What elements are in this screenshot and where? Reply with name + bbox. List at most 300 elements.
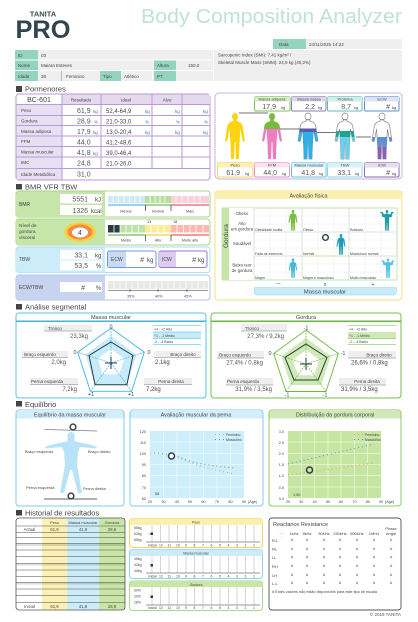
panel: tbw: # [192,257,196,264]
legend: muscle [153,326,201,344]
results table: 17,9 [77,129,91,136]
icon: very muscular figure [382,258,394,278]
box: peso: kg [245,171,249,176]
chart: weight history: 62kg [134,532,142,536]
results table: kg [145,130,150,135]
panel: visceral fat: gordura [19,229,36,235]
label: braco esquerdo fat: 27,4% / 0,8kg [226,360,263,366]
chart: weight history: 7 [202,544,204,548]
chart: muscle history: 40kg [134,569,142,573]
panel: body fat distribution: 20 [286,500,290,504]
panel: leg muscle rating: Avaliação muscular da perna [161,412,232,418]
panel: reactance resistance: # [373,554,376,560]
panel: muscle mass radar: Massa muscular [91,315,131,321]
panel: visceral fat: Muito alto [182,238,198,242]
panel: physique rating: Magro e musculoso [303,276,334,280]
panel: ecw tbw: 35% [127,294,135,298]
label: braco esquerdo: Braço esquerdo [24,352,56,357]
legend: muscle: -2 - -4 Baixo [154,340,173,344]
label: perna esquerda fat: 31,9% / 3,5kg [235,387,272,393]
panel: reactance resistance: RH [272,564,278,569]
panel: muscle mass radar [16,313,206,398]
panel: body composition [215,93,402,179]
panel: leg muscle rating: Feminino [226,433,240,437]
chart: muscle history: 11 [168,574,171,578]
panel: reactance resistance: # [390,572,393,577]
label: braco direito: Braço direito [170,352,196,357]
box: proteina [328,96,362,111]
table: history: 61,9 [50,527,59,532]
legend: muscle: +1 - -1 Médio [154,334,175,338]
panel: reactance resistance: L-L [272,581,279,586]
panel: muscle balance: Braço direito [88,449,111,454]
box: massa adiposa: kg [281,105,285,110]
icon: body outline [45,432,97,493]
box: peso: 61,9 [226,170,240,177]
icon: thin figure [289,258,297,278]
panel: tbw: kg [95,254,101,260]
panel: leg muscle rating: 30 [161,500,166,504]
figure: ecw and icw [372,113,392,159]
date row [273,39,402,49]
box: proteina: Proteína [337,97,353,102]
panel: tbw: ICW [162,257,172,263]
panel: reactance resistance: # [323,554,326,560]
figure: protein and tbw [335,113,355,159]
chart: weight history: 1 [253,544,255,548]
panel: leg muscle rating: 60 [142,497,146,501]
results table: 21,0-33,0 [106,120,132,126]
chart: muscle history: 8 [194,574,196,578]
panel: reactance resistance: # [306,537,309,542]
heading: historial: Historial de resultados [25,508,99,518]
results table: % [204,120,208,124]
panel: visceral fat: Alto [155,238,161,242]
panel: reactance resistance: # [291,580,294,585]
box: massa muscular: Massa muscular [294,163,324,168]
chart: fat history: 9 [185,606,187,610]
chart: fat history: 10 [176,606,180,610]
icon: solidly built figure [380,210,394,231]
panel: reactance resistance: # [339,580,342,585]
logo: TANITA [30,10,57,18]
panel: reactance resistance: # [291,537,294,542]
panel: body fat distribution: 70 [352,500,357,504]
chart: weight history: 8 [194,544,196,548]
panel: ecw tbw: # [81,285,85,292]
logo: PRO [16,16,70,44]
sarcopenic index: Skeletal Muscle Mass (SMM): 24,9 kg (40,2%) [218,60,311,65]
label: braco esquerdo [22,351,68,366]
results table: kg [145,109,150,114]
chart: muscle history: 3 [236,574,238,578]
panel: body fat distribution: Feminino [365,433,379,437]
label: braco esquerdo fat [217,351,264,366]
panel: reactance resistance [269,518,401,610]
results table: % [176,120,180,124]
box: proteina: kg [354,105,358,110]
results table: 41,2-48,6 [106,140,132,146]
panel: body fat distribution: 1.0 [279,474,284,478]
panel: reactance resistance: # [390,554,393,560]
chart: muscle history: 12 [159,574,163,578]
radar chart: fat [268,326,345,398]
box: massa ossea: kg [318,105,322,110]
box: massa muscular: kg [319,171,323,176]
panel: reactance resistance: Reactance Resistance [273,522,328,528]
icon: normal figure [336,234,346,255]
chart: weight history: 9 [185,544,187,548]
panel: reactance resistance: # [373,537,376,542]
box: peso: Peso [230,163,240,168]
label: braco esquerdo: 2,0kg [51,360,66,366]
panel: body fat distribution: 1.5 [279,463,284,467]
panel: reactance resistance: # [373,546,376,551]
panel: reactance resistance: RL [272,546,278,552]
panel: bmr [16,191,210,217]
panel: leg muscle rating: 50 [188,500,192,504]
results table: Ideal [121,98,131,102]
heading: analise segmental: Análise segmental [25,302,87,312]
table: history: Inicial [24,604,35,609]
label: perna direita: Perna direita [158,379,184,384]
panel: physique rating: Robusto [350,228,363,232]
label: perna direita fat: 31,9% / 3,5kg [341,387,378,393]
chart: muscle history: 1 [253,574,255,578]
chart: muscle history: 5 [219,574,221,578]
panel: bmr: 5551 [72,196,88,204]
table: history: Peso [50,520,60,525]
panel: physique rating: 0 [324,282,327,287]
panel: reactance resistance: # [291,554,294,560]
panel: physique rating: Alto [238,221,246,226]
chart: muscle history: 4 [228,574,230,578]
table: history: 28,9 [108,527,117,532]
patient info: Idade [18,74,30,79]
icon: visceral fat gauge: 4 [78,230,82,237]
patient info: Nome [18,63,31,68]
panel: visceral fat: 18 [173,220,177,224]
results table: 61,9 [77,108,91,115]
chart: weight history: Inicial [148,544,157,548]
panel: tbw: # [140,257,144,264]
chart: weight history: 10 [176,544,180,548]
label: perna direita fat: Perna direita [354,379,380,384]
results table: Peso [21,108,32,113]
label: braco esquerdo fat: Braço esquerdo [219,352,251,358]
box: icw: # [386,170,390,177]
legend: fat: +4 - +2 Alto [349,328,367,332]
table: history: 41,8 [79,604,88,609]
sarcopenic index [214,50,402,81]
results table: kg [203,109,208,114]
panel: leg muscle rating: 90 [242,500,246,504]
results table: Resultado [71,98,92,102]
chart: fat history: 2 [244,606,246,610]
panel: reactance resistance: 50kHz [318,531,330,536]
patient info: Feminino [66,74,85,79]
panel: muscle balance: Equilíbrio da massa muscular [34,412,106,418]
box: ecw: # [386,104,390,111]
results table: kg [203,130,208,135]
radar chart: fat: -1 [304,326,308,332]
panel: physique rating: de gordura [232,268,253,273]
box: tbw: kg [355,171,359,176]
chart: weight history: 12 [159,544,163,548]
panel: leg muscle rating: 120 [140,430,146,434]
label: perna direita fat [339,378,386,393]
panel: physique rating: Musculoso normal [350,252,379,256]
panel: physique rating: Falta de exercício [255,252,283,256]
legend: fat [348,326,396,344]
panel: physique rating: Obeso [303,228,313,232]
chart: fat history: 8 [194,606,196,610]
label: braco direito fat: 26,6% / 0,8kg [351,360,388,366]
label: braco direito fat: Braço direito [366,352,392,358]
panel: reactance resistance: # [291,563,294,568]
panel: reactance resistance: # [323,537,326,542]
results table: Massa muscular [21,150,54,154]
panel: leg muscle rating: 110 [140,441,146,445]
panel: leg muscle rating: Masculino [226,438,242,442]
label: perna esquerda: 7,2kg [62,387,77,393]
box: massa muscular [292,162,326,177]
chart: muscle history: 2 [244,574,246,578]
label: perna esquerda fat: Perna esquerda [227,379,260,384]
patient info: 38 [41,74,47,79]
chart: muscle history: 9 [185,574,187,578]
radar chart: muscle: 0 [73,350,77,356]
label: tronco fat [241,324,287,340]
panel: tbw: kg [147,258,153,264]
legend: muscle: +4 - +2 Alto [154,328,172,332]
panel: reactance resistance: # [291,546,294,551]
table: history: Massa muscular [68,520,98,525]
chart: fat history: 3 [236,606,238,610]
label: perna esquerda fat [226,378,273,393]
panel: tbw: % [96,264,102,270]
panel: physique rating: Avaliação física [289,194,328,200]
patient info: ID [18,53,23,58]
panel: visceral fat: Nível de [19,223,37,229]
results table: 41,8 [77,150,91,157]
results table: % [145,120,149,124]
panel: reactance resistance: # [306,546,309,551]
results table: IMC [21,160,30,165]
radar chart: muscle [73,324,151,398]
results table: kg [93,130,98,135]
panel: reactance resistance: # [291,572,294,577]
results table: kg [175,130,180,135]
panel: leg muscle rating: 58 [155,492,159,496]
panel: leg muscle rating: 90 [142,463,146,467]
table: history: 28,9 [108,604,117,609]
panel: reactance resistance: # [373,572,376,577]
results table: 24,8 [77,160,91,168]
panel: reactance resistance: # [390,563,393,568]
box: icw [364,162,399,177]
panel: bmr: 1326 [72,208,88,215]
panel: reactance resistance: # [390,580,393,585]
results table: Alvo [163,98,172,102]
radar chart: muscle: 0 [147,350,151,356]
box: ecw: kg [392,105,396,110]
icon: hidden obese figure [288,210,298,231]
chart: muscle history: 45kg [134,557,142,561]
radar chart: muscle: +1 [88,392,94,398]
table: history: Actual [24,527,35,532]
panel: leg muscle rating: 20 [148,500,152,504]
panel: physique rating: em gordura [231,226,254,232]
panel: muscle balance: Perna direita [83,486,106,491]
panel: body fat distribution: 3.0 [279,430,284,434]
label: tronco [44,325,92,340]
box: massa ossea: 2,2 [305,104,315,111]
panel: visceral fat: 13 [147,220,151,224]
panel: physique rating: Magro [255,276,265,280]
chart: weight history: 6 [210,544,212,548]
chart: weight history: 60kg [134,538,142,542]
panel: body fat distribution: Masculino [365,438,381,442]
table: history: 61,9 [50,604,59,609]
panel: bmr: Mais [186,210,194,214]
panel: body fat distribution: 30 [299,500,303,504]
box: massa ossea [292,96,326,111]
legend: fat: +1 - -1 Médio [349,334,370,338]
results table: Gordura [21,118,38,124]
label: perna direita: 7,2kg [146,387,161,393]
results table: Idade Metabólica [21,172,56,177]
panel: leg muscle rating: (Age) [248,500,258,504]
panel: muscle balance [16,410,124,506]
panel: body fat distribution [269,410,401,506]
panel: body fat distribution: 90 [379,500,383,504]
box: proteina: 8,7 [341,104,351,111]
box: massa ossea: Massa óssea [297,97,322,102]
label: perna direita [144,378,192,393]
table: history: Gordura [105,520,120,525]
panel: reactance resistance: 500kHz [350,531,364,536]
box: tbw: TBW [341,163,350,168]
chart: muscle history: 6 [210,574,212,578]
panel: fat radar: Gordura [296,315,317,321]
results table: Massa adiposa [21,129,52,134]
chart: muscle history: 10 [176,574,180,578]
panel: reactance resistance: # [356,572,359,577]
box: icw: kg [392,171,396,176]
heading: bmr vfr tbw: BMR VFR TBW [25,182,78,192]
panel: visceral fat [16,219,210,245]
label: tronco: Tronco [48,326,62,331]
chart: weight history: 3 [236,544,238,548]
label: perna esquerda: Perna esquerda [31,379,64,384]
panel: ecw tbw: % [96,286,102,292]
box: ffm: 44,0 [263,170,277,177]
chart: weight history: Peso [192,520,200,524]
results table: 44,0 [77,140,91,146]
panel: body fat distribution: Distribuição da gordura corporal [296,412,374,418]
chart: muscle history: Massa muscular [183,552,210,556]
panel: physique rating: Massa muscular [304,290,346,296]
panel: reactance resistance: # [390,546,393,551]
chart: fat history: 11 [168,606,171,610]
patient info: 150,0 [188,63,200,68]
chart: muscle history [130,550,262,578]
panel: body fat distribution: 0.5 [279,486,284,490]
panel: tbw [16,247,210,272]
panel: visceral fat: Médio [121,238,131,242]
title: Body Composition Analyzer [141,5,402,28]
panel: tbw: ECW [111,257,123,263]
chart: fat history: 29% [134,594,141,598]
chart: fat history: 30% [134,588,141,592]
panel: reactance resistance: # [323,572,326,577]
panel: bmr: BMR [19,202,30,208]
panel: reactance resistance: # Estes valores não estão disponíveis para este tipo de escala [272,590,378,594]
panel: tbw: 53,5 [74,263,88,270]
patient info: Tipo [103,74,112,79]
box: massa adiposa: 17,9 [262,104,276,111]
panel: visceral fat: visceral [19,235,35,241]
patient info: PT [157,74,163,79]
results table: kg [93,109,98,114]
patient info: Maiara Esteves [41,63,73,68]
results table: 21,0-26,0 [106,162,132,168]
panel: physique rating: Saudável [233,241,251,246]
results table: FFM [21,139,30,144]
box: ecw [364,96,399,111]
panel: leg muscle rating: 60 [201,500,206,504]
panel: reactance resistance: # [390,537,393,542]
patient info: Atlético [124,74,139,79]
panel: reactance resistance: # [356,580,359,585]
chart: fat history: 5 [219,606,221,610]
panel: leg muscle rating [130,410,263,506]
box: tbw: 33,1 [337,170,351,177]
panel: reactance resistance: # [373,563,376,568]
panel: reactance resistance: # [339,554,342,560]
radar chart: fat: 0 [268,351,272,357]
panel: physique rating: Muito musculoso [350,276,376,280]
radar chart: fat: -1 [341,351,345,357]
panel: body fat distribution: 40 [312,500,317,504]
panel: reactance resistance: # [339,546,342,551]
box: tbw [328,162,362,177]
panel: body fat distribution: 80 [366,500,370,504]
icon: visceral fat gauge [64,222,96,242]
box: massa muscular: 41,8 [301,170,315,177]
panel: body fat distribution: 2.0 [279,452,284,456]
chart: muscle history: 7 [202,574,204,578]
heading: equilibrio: Equilíbrio [25,400,56,409]
panel: ecw tbw [16,275,210,300]
figure: weight [225,113,245,159]
chart: weight history: 65kg [134,526,142,530]
panel: leg muscle rating: 80 [228,500,233,504]
results table: 31,0 [77,172,91,178]
panel: physique rating: — [276,281,280,287]
panel: reactance resistance: # [323,563,326,568]
panel: reactance resistance: LH [272,573,277,578]
marker: physique position [323,235,328,240]
label: tronco fat: 27,3% / 9,2kg [247,334,284,340]
box: ffm: FFM [268,163,276,168]
panel: reactance resistance: # [306,563,309,568]
chart: fat history: 7 [202,606,204,610]
box: massa adiposa [254,96,290,111]
results table [16,94,210,180]
figure: bone and muscle [298,113,318,159]
